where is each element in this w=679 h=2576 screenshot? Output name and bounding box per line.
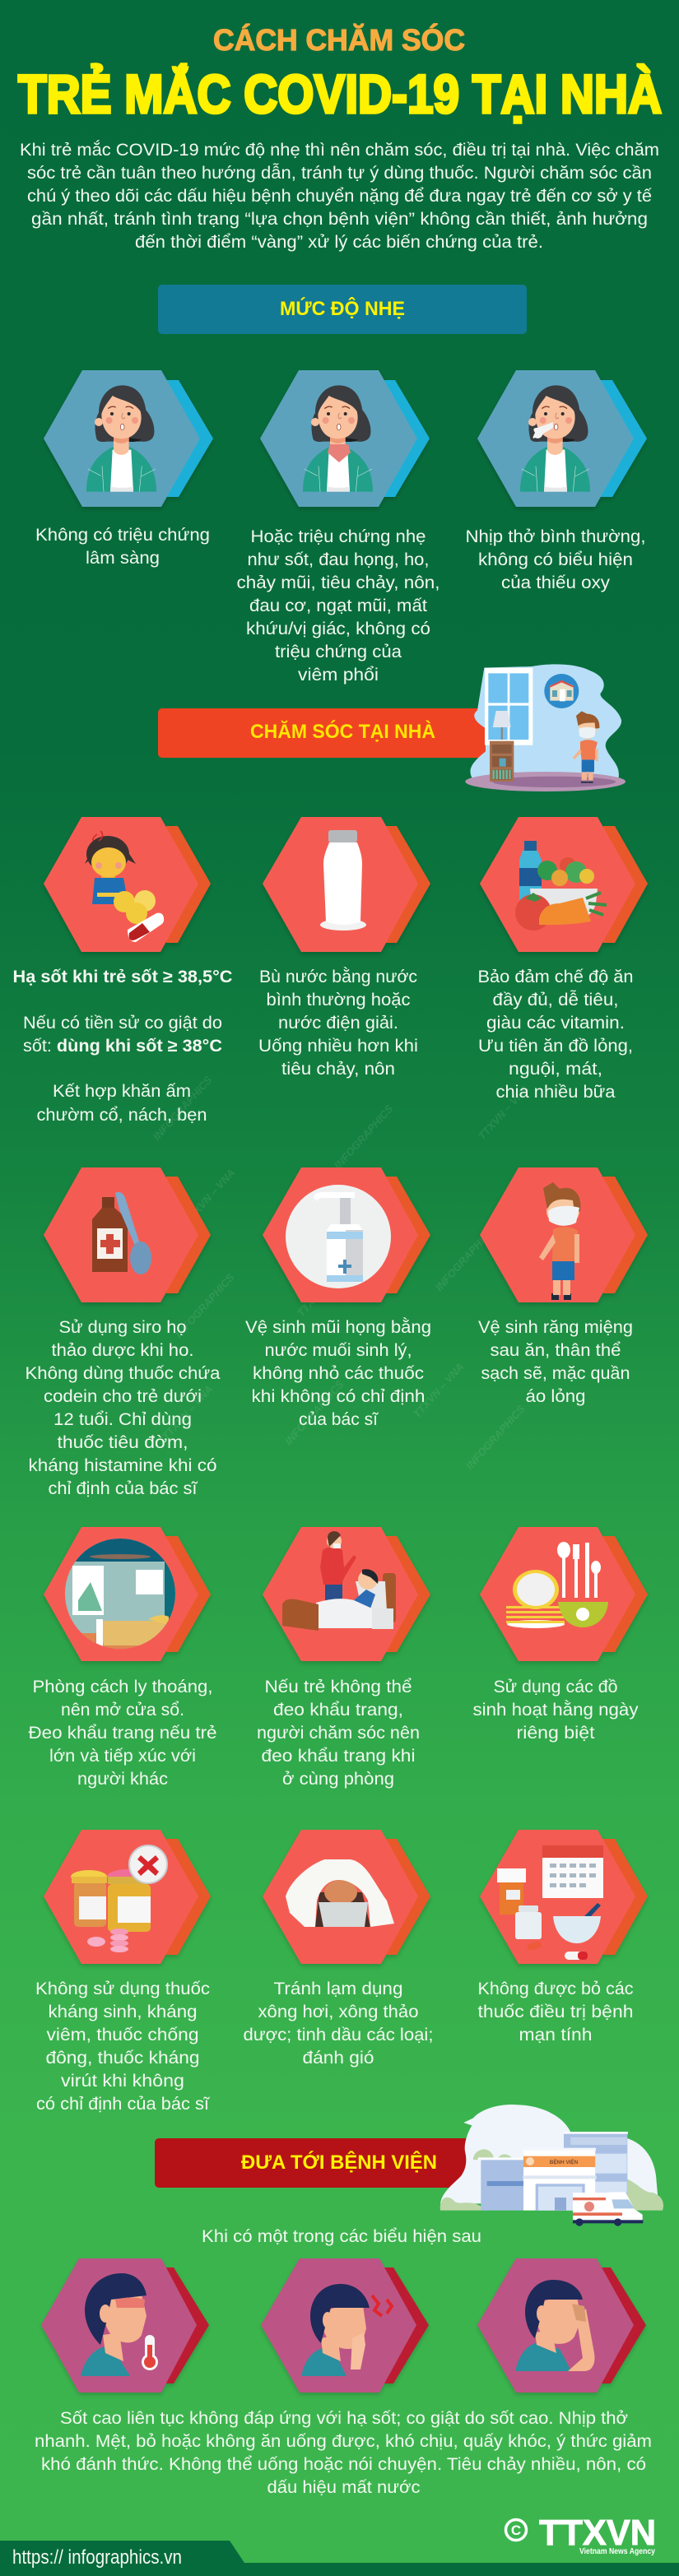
text: của thiếu oxy: [501, 573, 611, 592]
text: Hạ sốt khi trẻ sốt ≥ 38,5°C: [13, 968, 232, 986]
icon: woman: [86, 385, 156, 492]
watermarks: TTXVN – VNA: [476, 1083, 532, 1142]
watermarks: TTXVN – VNA: [160, 1383, 216, 1442]
intro paragraph: [20, 141, 659, 252]
text: Nhịp thở bình thường,: [466, 527, 645, 546]
panel: bù nước: [258, 817, 430, 1079]
hexagon: [477, 2258, 646, 2393]
text: sốt: dùng khi sốt ≥ 38°C: [23, 1037, 222, 1056]
text: Sử dụng các đồ: [494, 1678, 617, 1696]
hexagon: [480, 1830, 648, 1964]
text: triệu chứng của: [275, 643, 402, 661]
text: không nhỏ các thuốc: [253, 1364, 424, 1383]
text: thuốc tiêu đờm,: [58, 1433, 188, 1452]
icon: man coughing with zigzag: [301, 2284, 392, 2376]
text: đau cơ, ngạt mũi, mất: [249, 596, 427, 615]
panel: không dùng kháng sinh: [35, 1830, 211, 2114]
text: ở cùng phòng: [282, 1770, 394, 1789]
panel: đồ sinh hoạt riêng: [472, 1527, 648, 1743]
watermarks: INFOGRAPHICS: [282, 1378, 346, 1447]
text: chia nhiều bữa: [495, 1083, 616, 1102]
text: [244, 1980, 433, 2068]
watermarks: TTXVN – VNA: [295, 1260, 351, 1319]
text: Vệ sinh mũi họng bằng: [245, 1318, 431, 1337]
closing paragraph: dấu hiệu mất nước: [267, 2478, 420, 2497]
panel: nhịp thở bình thường: [466, 370, 647, 592]
text: như sốt, đau họng, ho,: [247, 550, 430, 569]
text: Bù nước bằng nước: [259, 968, 417, 986]
hexagon: [261, 2258, 429, 2393]
icon: man with thermometer: [81, 2273, 158, 2376]
hexagon: [44, 370, 213, 507]
text: không có biểu hiện: [478, 550, 633, 569]
watermarks: INFOGRAPHICS: [151, 1074, 215, 1143]
panel: siro ho: [25, 1167, 221, 1498]
text: Sử dụng siro họ: [59, 1318, 186, 1337]
text: chỉ định của bác sĩ: [48, 1479, 198, 1498]
text: nguội, mát,: [509, 1060, 602, 1079]
watermarks: INFOGRAPHICS: [332, 1102, 396, 1172]
text: viêm phổi: [298, 666, 379, 685]
icon: ventilated room: [65, 1539, 175, 1649]
section heading: chăm sóc tại nhà: CHĂM SÓC TẠI NHÀ: [250, 720, 435, 743]
intro paragraph: sóc trẻ cần tuân theo hướng dẫn, tránh tự ý dùng thuốc. Người chăm sóc cần: [27, 164, 652, 183]
text: Không dùng thuốc chứa: [25, 1364, 221, 1383]
icon: man holding head: [515, 2280, 594, 2371]
icon: child with fever and pills: [85, 831, 164, 942]
hexagon: [260, 370, 430, 507]
panel: man coughing: [261, 2258, 429, 2393]
panel: không có triệu chứng: [35, 370, 213, 568]
title: subtitle line: CÁCH CHĂM SÓC: [213, 22, 465, 57]
text: 12 tuổi. Chỉ dùng: [53, 1410, 192, 1429]
icon: medicine bottles: [71, 1845, 167, 1952]
hexagon: [44, 1830, 211, 1964]
icon: calendar and medicine: [497, 1845, 603, 1960]
text: Hoặc triệu chứng nhẹ: [250, 527, 426, 546]
text: sinh hoạt hằng ngày: [472, 1701, 639, 1720]
text: [245, 1318, 431, 1429]
text: [13, 968, 232, 1125]
text: virút khi không: [61, 2072, 184, 2091]
text: [237, 527, 439, 685]
text: áo lỏng: [525, 1387, 586, 1406]
text: Không có triệu chứng: [35, 526, 210, 545]
text: Ưu tiên ăn đồ lỏng,: [478, 1037, 633, 1056]
text: xông hơi, xông thảo: [258, 2003, 418, 2021]
text: người khác: [77, 1770, 168, 1789]
hexagon: [44, 1167, 211, 1302]
text: [25, 1318, 221, 1498]
text: Nếu trẻ không thể: [265, 1678, 412, 1696]
icon: boy with mask: [539, 1182, 580, 1300]
text: Đeo khẩu trang nếu trẻ: [28, 1724, 217, 1743]
text: đông, thuốc kháng: [46, 2049, 199, 2068]
icon: dishes and cutlery: [506, 1542, 608, 1628]
text: [472, 1678, 639, 1743]
watermarks: TTXVN – VNA: [411, 1361, 467, 1420]
logo: TTXVN: C: [511, 2523, 521, 2538]
panel: man with headache: [477, 2258, 646, 2393]
text: đeo khẩu trang khi: [262, 1747, 415, 1766]
hexagon: [41, 2258, 209, 2393]
text: mạn tính: [519, 2026, 593, 2045]
panel: phòng cách ly: [28, 1527, 217, 1789]
text: chườm cổ, nách, bẹn: [36, 1106, 207, 1125]
text: [477, 1980, 634, 2045]
text: [258, 968, 418, 1079]
hexagon: [263, 1167, 430, 1302]
panel: người chăm sóc đeo khẩu trang: [257, 1527, 430, 1789]
text: thảo dược khi ho.: [51, 1341, 194, 1360]
hexagon: [263, 1830, 430, 1964]
text: thuốc điều trị bệnh: [477, 2003, 634, 2021]
footer band: [0, 2541, 679, 2576]
hexagon: [44, 1527, 211, 1661]
text: [35, 1980, 210, 2114]
section heading: mức độ nhẹ: MỨC ĐỘ NHẸ: [280, 297, 405, 320]
icon: carer and sick child in bed: [282, 1531, 396, 1631]
text: khi không có chỉ định: [252, 1387, 425, 1406]
text: đánh gió: [303, 2049, 374, 2068]
text: [477, 968, 634, 1102]
intro paragraph: đến thời điểm “vàng” xử lý các biến chứng của trẻ.: [135, 233, 543, 252]
panel: tránh xông hơi: [244, 1830, 433, 2068]
text: kháng sinh, kháng: [48, 2003, 198, 2021]
panel: triệu chứng nhẹ: [237, 370, 439, 685]
section heading: chăm sóc tại nhà: [158, 708, 504, 758]
panel: man with fever: [41, 2258, 209, 2393]
intro paragraph: gần nhất, tránh tình trạng “lựa chọn bệnh viện” không cần thiết, ảnh hưởng: [31, 210, 648, 229]
text: đeo khẩu trang,: [273, 1701, 403, 1720]
icon: saline bottle: [286, 1185, 391, 1288]
icon: woman breathing: [520, 385, 590, 492]
closing paragraph: [35, 2409, 652, 2497]
text: sạch sẽ, mặc quần: [481, 1364, 630, 1383]
logo: TTXVN: TTXVN: [539, 2513, 656, 2553]
section heading: mức độ nhẹ: [158, 285, 527, 334]
illustration: child at home: [465, 664, 626, 791]
text: Bảo đảm chế độ ăn: [477, 968, 634, 986]
text: codein cho trẻ dưới: [44, 1387, 202, 1406]
text: lớn và tiếp xúc với: [49, 1747, 196, 1766]
watermarks: TTXVN – VNA: [182, 1167, 238, 1226]
text: kháng histamine khi có: [28, 1456, 217, 1475]
text: khứu/vị giác, không có: [246, 620, 430, 638]
text: [478, 1318, 633, 1406]
watermarks: INFOGRAPHICS: [173, 1271, 237, 1340]
text: sau ăn, thân thể: [491, 1341, 621, 1360]
icon: food: [515, 841, 607, 931]
text: giàu các vitamin.: [486, 1014, 625, 1033]
text: [257, 1678, 420, 1789]
closing paragraph: khó đánh thức. Không thể uống hoặc nói chuyện. Tiêu chảy nhiều, nôn, có: [41, 2455, 646, 2474]
text: dược; tinh dầu các loại;: [244, 2026, 433, 2045]
footer url: https:// infographics.vn: [12, 2546, 182, 2569]
logo: TTXVN: Vietnam News Agency: [579, 2547, 655, 2556]
text: Uống nhiều hơn khi: [258, 1037, 418, 1056]
icon: steam inhalation with towel: [286, 1859, 394, 1927]
text: đầy đủ, dễ tiêu,: [492, 991, 619, 1010]
text: bình thường hoặc: [267, 991, 410, 1010]
watermarks: INFOGRAPHICS: [463, 1403, 528, 1472]
panel: vệ sinh mũi họng: [245, 1167, 431, 1429]
watermarks: INFOGRAPHICS: [433, 1224, 497, 1293]
closing paragraph: Sốt cao liên tục không đáp ứng với hạ sốt; co giật do sốt cao. Nhịp thở: [60, 2409, 628, 2428]
panel: không bỏ thuốc mạn tính: [477, 1830, 648, 2045]
text: [466, 527, 645, 592]
icon: bottle: [320, 830, 366, 931]
intro paragraph: chú ý theo dõi các dấu hiệu bệnh chuyển nặng để đưa ngay trẻ đến cơ sở y tế: [27, 187, 652, 206]
text: có chỉ định của bác sĩ: [36, 2095, 210, 2114]
illustration: hospital and ambulance: [440, 2105, 663, 2226]
text: Không được bỏ các: [477, 1980, 634, 1998]
hexagon: [44, 817, 211, 952]
text: lead-in sentence: Khi có một trong các biểu hiện sau: [202, 2227, 481, 2246]
text: người chăm sóc nên: [257, 1724, 420, 1743]
text: nước muối sinh lý,: [265, 1341, 412, 1360]
section heading: đưa tới bệnh viện: ĐƯA TỚI BỆNH VIỆN: [241, 2151, 437, 2174]
watermarks: [151, 1074, 532, 1472]
text: riêng biệt: [517, 1724, 595, 1743]
hexagon: [480, 1527, 648, 1661]
text: Tránh lạm dụng: [273, 1980, 403, 1998]
text: Nếu có tiền sử co giật do: [23, 1014, 222, 1033]
text: nên mở cửa sổ.: [61, 1701, 184, 1720]
text: [35, 526, 210, 568]
hexagon: [480, 817, 648, 952]
hexagon: [480, 1167, 648, 1302]
text: viêm, thuốc chống: [46, 2026, 198, 2045]
section heading: đưa tới bệnh viện: [155, 2138, 480, 2188]
icon: syrup and spoon: [92, 1192, 151, 1274]
panel: vệ sinh răng miệng: [478, 1167, 648, 1406]
panel: chế độ ăn: [477, 817, 648, 1102]
panel: hạ sốt: [13, 817, 232, 1125]
closing paragraph: nhanh. Mệt, bỏ hoặc không ăn uống được, khó chịu, quấy khóc, ý thức giảm: [35, 2432, 652, 2451]
text: Không sử dụng thuốc: [35, 1980, 210, 1998]
hexagon: [477, 370, 647, 507]
text: lâm sàng: [86, 549, 160, 568]
hexagon: [263, 1527, 430, 1661]
text: của bác sĩ: [299, 1410, 379, 1429]
hospital sign: BỆNH VIỆN: [550, 2158, 579, 2165]
text: chảy mũi, tiêu chảy, nôn,: [237, 573, 439, 592]
text: Vệ sinh răng miệng: [478, 1318, 633, 1337]
text: [28, 1678, 217, 1789]
text: nước điện giải.: [278, 1014, 398, 1033]
intro paragraph: Khi trẻ mắc COVID-19 mức độ nhẹ thì nên chăm sóc, điều trị tại nhà. Việc chăm: [20, 141, 659, 160]
hexagon: [263, 817, 430, 952]
text: tiêu chảy, nôn: [281, 1060, 395, 1079]
text: Kết hợp khăn ấm: [53, 1082, 191, 1101]
icon: woman with sore throat: [303, 385, 373, 492]
text: Phòng cách ly thoáng,: [33, 1678, 212, 1696]
